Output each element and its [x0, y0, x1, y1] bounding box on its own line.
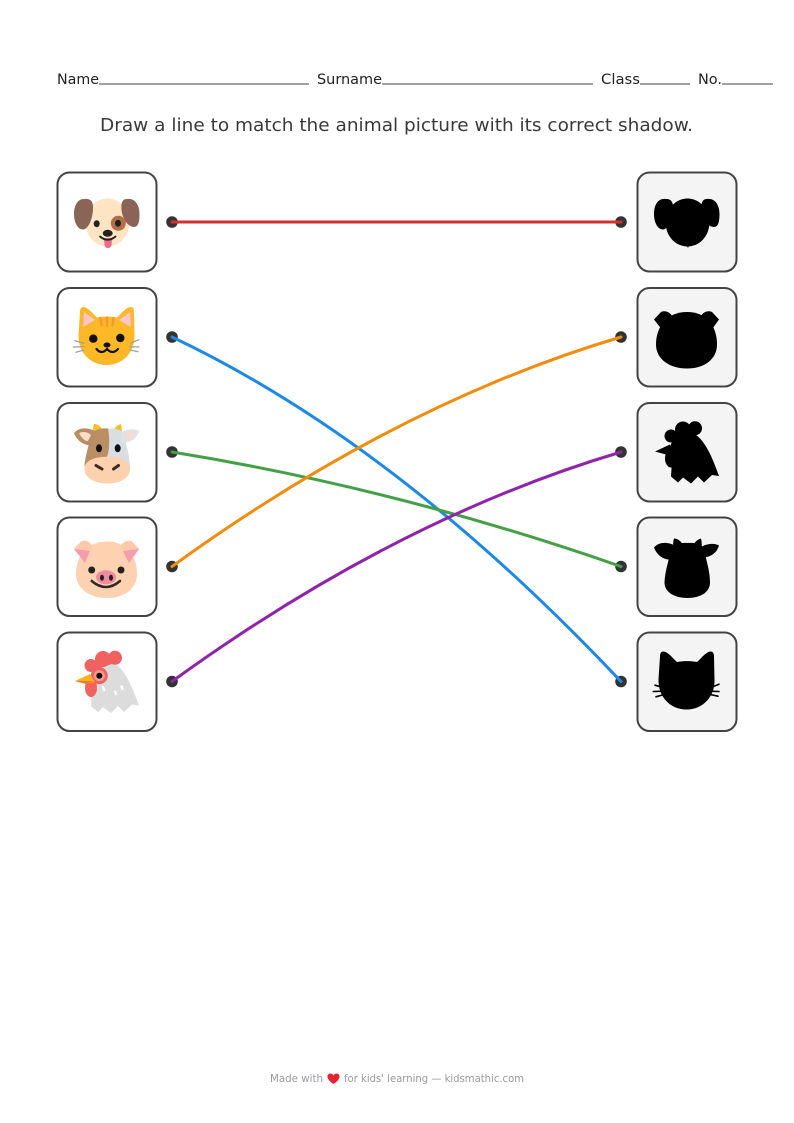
- panel: cat picture: [58, 288, 156, 386]
- footer: Made with: [270, 1073, 323, 1085]
- arrow: pig match line: [172, 337, 621, 566]
- field: class: Class: [601, 72, 640, 88]
- footer: [270, 1073, 524, 1085]
- icon: dog: [74, 198, 140, 248]
- footer: for kids' learning — kidsmathic.com: [344, 1073, 524, 1085]
- arrow: dog match line: [172, 220, 621, 224]
- field: number: [698, 72, 773, 88]
- icon: pig silhouette: [654, 311, 719, 368]
- icon: cat silhouette: [653, 652, 719, 710]
- icon: dog silhouette: [654, 198, 720, 248]
- arrow: cow match line: [172, 452, 621, 566]
- panel: dog picture: [58, 172, 156, 272]
- arrow: chicken match line: [172, 452, 621, 682]
- icon: cow: [74, 424, 139, 484]
- arrow: cat match line: [172, 337, 621, 682]
- panel: cat shadow: [638, 632, 736, 731]
- field: number: No.: [698, 72, 722, 88]
- icon: cat: [73, 307, 139, 365]
- student details header: [57, 72, 773, 88]
- field: class: [601, 72, 690, 88]
- panel: cow shadow: [638, 518, 736, 616]
- panel: chicken picture: [58, 632, 156, 731]
- connection dots: [166, 216, 627, 687]
- panel: cow picture: [58, 403, 156, 502]
- title instruction: Draw a line to match the animal picture with its correct shadow.: [100, 115, 693, 136]
- panel: chicken shadow: [638, 403, 736, 502]
- icon: chicken silhouette: [655, 421, 719, 484]
- field: surname: Surname: [317, 72, 382, 88]
- field: name: Name: [57, 72, 99, 88]
- panel: dog shadow: [638, 172, 736, 272]
- icon: cow silhouette: [654, 538, 719, 598]
- icon: heart: [328, 1073, 340, 1084]
- icon: chicken: [75, 651, 139, 713]
- panel: pig shadow: [638, 288, 736, 386]
- panel: pig picture: [58, 518, 156, 616]
- icon: pig: [74, 541, 139, 598]
